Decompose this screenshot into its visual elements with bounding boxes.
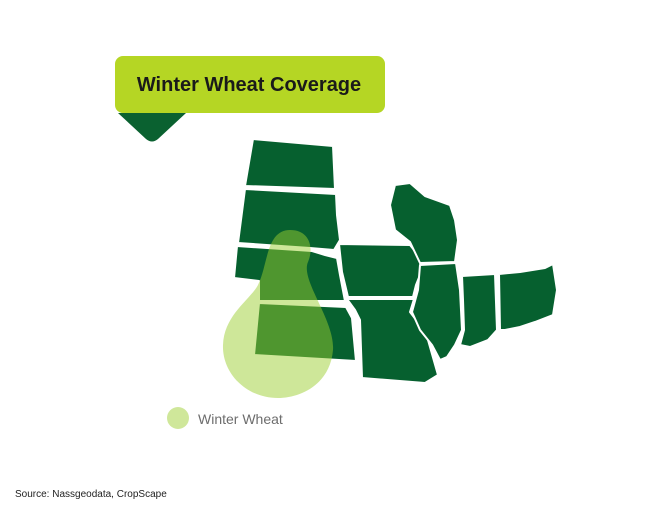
title banner bbox=[115, 56, 385, 113]
winter wheat area bbox=[223, 230, 333, 398]
legend: Winter Wheat bbox=[198, 411, 283, 427]
title pointer bbox=[118, 113, 186, 142]
source: Source: Nassgeodata, CropScape bbox=[15, 489, 167, 500]
title banner: Winter Wheat Coverage bbox=[137, 74, 361, 96]
states bbox=[234, 139, 557, 383]
legend bbox=[167, 407, 283, 429]
